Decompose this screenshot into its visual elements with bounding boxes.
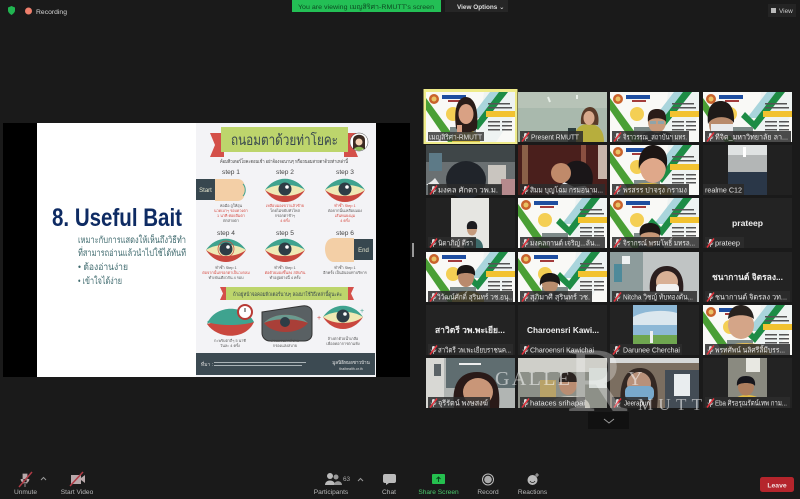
tip 2: eye with glasses [262, 306, 312, 348]
slide body text: • ต้องอ่านง่าย [78, 262, 128, 273]
tip 3: sparkling eye: + [317, 315, 321, 322]
participants button [314, 473, 363, 496]
step 2: eyes left right: step 2 [276, 169, 294, 176]
tile: Nitcha with mask: Nitcha วิชญ์ ทับทองตัน... [623, 292, 693, 302]
slide body text [78, 233, 186, 287]
banner: viewing screen: You are viewing เมญสิริศา-RMUTT's screen [298, 3, 434, 11]
tile: Darunee with landscape: Darunee Cherchai [623, 346, 680, 354]
tip 1: closed eye with clock: กะพริบตาถี่ๆ 5 นาที [214, 338, 246, 343]
shared slide panel [3, 123, 410, 377]
button: view: View [779, 8, 793, 15]
tip 3: sparkling eye [317, 306, 364, 346]
step 3: eyes diagonal: ต่อจากนั้นเหลือบมอง [328, 207, 362, 213]
top bar: security and recording status: Recording [36, 9, 67, 16]
start video button [61, 472, 94, 496]
step 2: eyes left right: โดยไม่ขยับหัวไหล่ [270, 208, 301, 213]
scroll down button [588, 412, 629, 429]
slide body text: เหมาะกับการแสดงให้เห็นถึงวิธีทำ [78, 233, 186, 246]
tile: name only hospital: สาวิตรี วพ.พะเยียบราชนค... [438, 346, 511, 354]
tile: name only hospital: สาวิตรี วพ.พะเยีย... [435, 325, 505, 335]
icon: woman avatar [350, 133, 368, 151]
tile: Charoensri: Charoensri Kawi... [527, 325, 599, 335]
watermark: GALLERY RMUTT: Y [628, 368, 642, 390]
tile: man near white wall [426, 198, 515, 248]
tile: realme C12: realme C12 [705, 186, 742, 194]
tile: man in yellow [426, 252, 515, 302]
tile: active speaker [424, 89, 518, 144]
tile: name only: ชนากานต์ จิตรลง วท... [715, 292, 787, 302]
slide heading: 8. Useful Bait [52, 204, 183, 232]
participants button: 63 [343, 476, 351, 483]
tile: Charoensri [518, 305, 607, 355]
step 2: eyes left right: กรอกตาช้าๆ [275, 213, 295, 218]
tip 1: closed eye with clock: วันละ 4 ครั้ง [220, 342, 240, 348]
tile: Charoensri: Charoensri Kawichai [530, 346, 594, 354]
tile: man near white wall: นิดาภิญ์ ดีรา [438, 238, 473, 248]
participant gallery [424, 89, 792, 408]
leave button: Leave [767, 482, 787, 490]
unmute button: Unmute [14, 489, 37, 496]
unmute button [14, 472, 46, 496]
step 1: hand over eye: นวดเบาๆ รอบดวงตา [214, 209, 248, 213]
start video button: Start Video [61, 489, 94, 496]
panel divider handle [412, 243, 414, 257]
tile: prateep: prateep [732, 218, 763, 228]
tile: hataces [518, 358, 607, 408]
tile: name only: ชนากานต์ จิตรลง... [712, 272, 783, 282]
tile: name only [703, 252, 792, 302]
step 2: eyes left right: เหลือบมองขวาแล้วซ้าย [266, 203, 304, 208]
tile: participant in red room: สิมม บุญโฉม กรมอนาม... [530, 186, 603, 194]
record button [477, 474, 499, 496]
step 3: eyes diagonal: ทำซ้ำ Step 1 [334, 202, 356, 208]
watermark: GALLERY RMUTT: GALLE [495, 368, 570, 390]
tile: man in yellow center [703, 358, 792, 408]
step 6: hand over eye end: End [358, 248, 369, 254]
source footer: thaihealth.or.th [339, 367, 363, 371]
tip 3: sparkling eye: เพื่อลดอาการตาแห้ง [326, 341, 360, 346]
step 1: hand over eye: ห่อมือ ถูให้อุ่น [220, 203, 242, 209]
step 3: eyes diagonal [325, 169, 365, 223]
tile: Nitcha with mask [610, 252, 699, 302]
tile: woman lower frame: จิรากรณ์ พรมโพธิ์ มทรล... [622, 238, 695, 248]
step 4: eyes circle: step 4 [217, 230, 235, 237]
tile: man in yellow center: Eba ศิรอรุณรัตน์เทพ กาม... [715, 398, 787, 408]
tile: woman blue mask: Jeerapun [624, 398, 650, 408]
step 5: eyes up down [265, 230, 306, 280]
chat button: Chat [382, 489, 396, 496]
slide body text: • เข้าใจได้ง่าย [78, 275, 122, 287]
share screen button [418, 474, 459, 496]
step 1: hand over eye: พักสายตา [223, 218, 239, 223]
record button: Record [477, 489, 499, 496]
step 4: eyes circle [202, 230, 250, 280]
tip 2: eye with glasses: กรองแสงสบาย [273, 343, 297, 348]
step 3: eyes diagonal: step 3 [336, 169, 354, 176]
green tip ribbon: ถ้าอยู่หน้าจอคอมพิวเตอร์นานๆ ลองมาใช้วิธีเหล่านี้ดูนะคะ [233, 290, 342, 298]
tile: woman lower frame [610, 198, 699, 248]
button: view options [445, 0, 508, 12]
tile: slide only: มงคลกานต์ เจริญ...ลัน... [530, 238, 600, 248]
slide body text: ที่สามารถอ่านแล้วนำไปใช้ได้ทันที [78, 246, 186, 259]
tile: woman on slide: สุภิมาศี สุรินทร์ วช. [530, 292, 590, 302]
step 6: hand over eye end [322, 230, 373, 275]
step 4: eyes circle: ทำเช่นเดียวกัน 4 รอบ [208, 275, 244, 280]
tile: woman looking down: พรทศัพน์ นลิศรีลี้มีบรร... [715, 344, 785, 354]
source footer: มูลนิธิหมอชาวบ้าน [332, 360, 371, 366]
step 4: eyes circle: ทำซ้ำ Step 1 [215, 264, 237, 270]
tile: woman in office [426, 358, 515, 408]
tile: participant in office: มงคล ศักดา วพ.ม. [438, 186, 498, 194]
step 1: hand over eye [196, 169, 248, 223]
tile: realme C12 [703, 145, 792, 195]
step 3: eyes diagonal: เส้นทแยงมุม [335, 213, 356, 219]
tile: woman looking down [703, 305, 792, 355]
reactions button: Reactions [518, 489, 548, 496]
toolbar [14, 472, 794, 496]
tile: participant in office [426, 145, 515, 199]
tip 2: eye with glasses: สวมแว่นตาที่ช่วย [271, 338, 299, 343]
tile: slide only [518, 198, 607, 248]
step 2: eyes left right [265, 169, 305, 223]
tile: woman in yellow [610, 145, 699, 195]
tip 1: closed eye with clock [207, 305, 254, 348]
tile: name only hospital [426, 305, 515, 355]
banner: viewing screen [292, 0, 441, 12]
step 1: hand over eye: 1 นาที ค่อยลืมตา [217, 213, 245, 218]
step 5: eyes up down: ต่อด้วยมองขึ้นลง สลับกัน [265, 269, 306, 275]
tile: participant in red room [518, 145, 607, 195]
green tip ribbon [220, 287, 354, 300]
step 5: eyes up down: ทำซ้ำ Step 1 [274, 264, 296, 270]
reactions button [518, 473, 548, 496]
infographic: eye exercise [196, 123, 376, 377]
step 5: eyes up down: step 5 [276, 230, 294, 237]
tile: participant with mask [703, 92, 792, 142]
step 6: hand over eye end: step 6 [336, 230, 354, 237]
step 2: eyes left right: 4 ครั้ง [280, 217, 290, 223]
step 6: hand over eye end: อีกครั้ง เป็นอันจบท่าบริหาร [322, 269, 367, 275]
tile: participant with mask: ทีจิต_มหาวิทยาลัย ลา... [715, 132, 788, 142]
step 4: eyes circle: ต่อจากนั้นกรอกตาเป็นวงกลม [202, 269, 250, 275]
tile: participant with glasses [610, 92, 699, 142]
tile: woman in yellow: พรสรร ปาจรุง กรามง [623, 186, 687, 194]
source footer: ที่มา : [201, 361, 213, 368]
tile: participant with glasses: จิราวรรณ_สถาบันฯ มทร. [622, 132, 687, 142]
watermark: GALLERY RMUTT [495, 329, 703, 431]
share screen button: Share Screen [418, 489, 459, 496]
tile: hataces: hataces srihapai [530, 398, 585, 408]
tile: woman in office: จุรีรัตน์ พงษสงฆ์ [438, 398, 488, 408]
infographic subtitle: ค้อมพิวเตอร์โยคะตอนเช้า อย่าจ้องจอนานๆ หรือถนอมสายตาด้วยท่าเหล่านี้ [220, 156, 349, 165]
button: view [768, 4, 796, 17]
tip 3: sparkling eye: ล้างตาด้วยน้ำเกลือ [328, 335, 358, 341]
tile: prateep: prateep [715, 238, 740, 248]
tile: Present RMUTT: Present RMUTT [531, 132, 579, 142]
step 6: hand over eye end: ทำซ้ำ Step 1 [334, 264, 356, 270]
chat button [382, 474, 396, 496]
tile: prateep [703, 198, 792, 248]
participants button: Participants [314, 489, 349, 496]
step 5: eyes up down: ทำอยู่อย่างนี้ 4 ครั้ง [270, 274, 301, 280]
tile: woman on slide [518, 252, 607, 302]
leave button [760, 477, 794, 492]
tile: active speaker: เมญสิริศา-RMUTT [429, 132, 482, 142]
tile: Darunee with landscape [610, 305, 699, 355]
top bar: security and recording status [8, 6, 67, 16]
step 1: hand over eye: step 1 [222, 169, 240, 176]
infographic title ribbon: ถนอมตาด้วยท่าโยคะ [231, 131, 338, 149]
source footer [196, 353, 375, 375]
step 1: hand over eye: Start [199, 188, 212, 194]
infographic title ribbon [210, 127, 358, 157]
tile: woman blue mask [610, 358, 699, 408]
watermark: GALLERY RMUTT: R [566, 329, 628, 431]
tile: Present RMUTT [518, 92, 607, 142]
tile: man in yellow: วิวัฒน์ศักดิ์ สุรินทร์ วช.อนุ.. [436, 292, 512, 302]
button: view options: View Options ⌄ [457, 4, 504, 11]
step 3: eyes diagonal: 4 ครั้ง [340, 217, 350, 223]
tip 3: sparkling eye: + [360, 308, 364, 315]
watermark: GALLERY RMUTT: MUTT [638, 395, 703, 414]
